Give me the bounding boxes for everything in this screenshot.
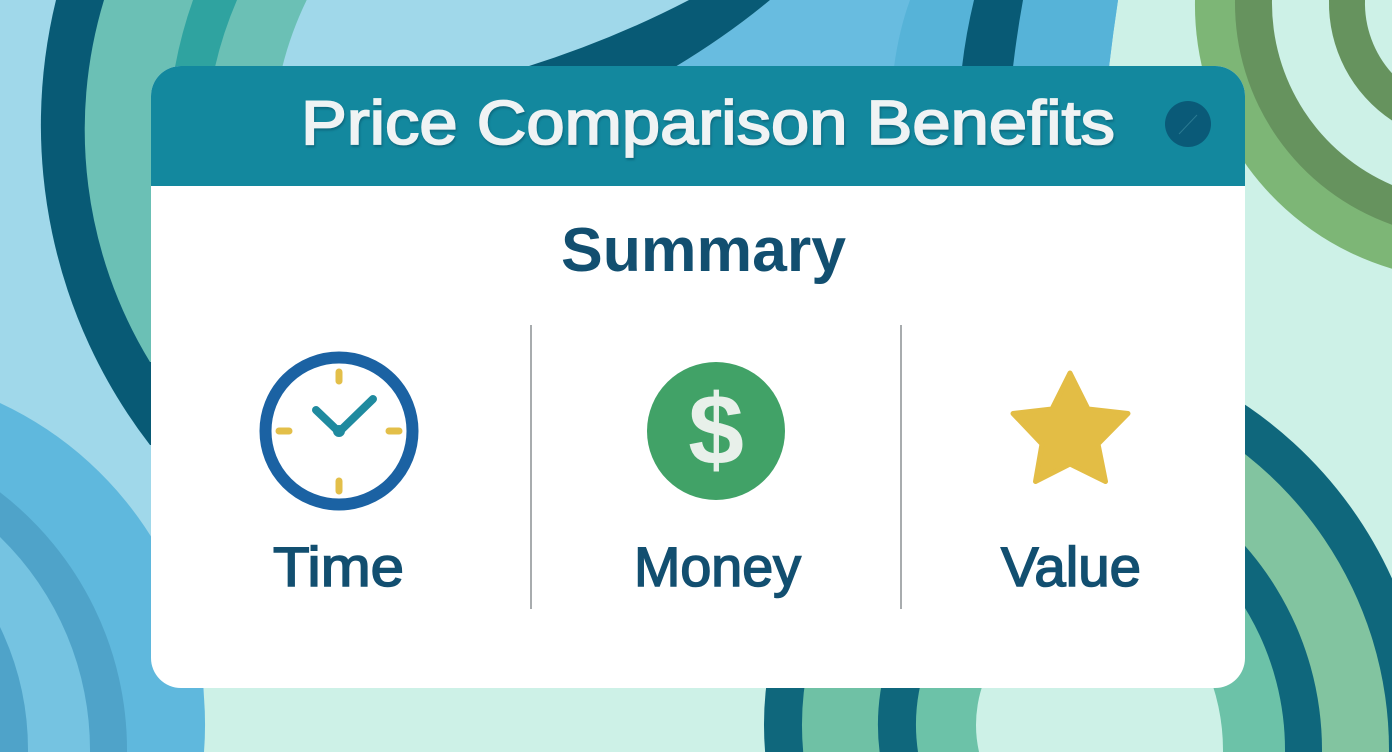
icon: dollar coin: $ — [688, 374, 744, 486]
arcs: top centre blue bands — [526, 0, 1118, 67]
icon: star — [1013, 373, 1128, 482]
label: value: Value — [1001, 535, 1141, 598]
panel: summary card — [151, 66, 1245, 688]
panel header band — [151, 66, 1245, 186]
column: money — [634, 362, 801, 598]
arcs: bottom centre rings — [764, 660, 1160, 752]
arcs: lower right rings — [1150, 357, 1392, 752]
heading: summary: Summary — [561, 216, 847, 285]
arcs: upper left dark and teal rings — [41, 0, 340, 445]
column: value — [1001, 373, 1141, 598]
icon: clock — [266, 358, 412, 504]
arcs: top right green rings — [1195, 0, 1392, 269]
arcs: lower left blue rings — [0, 403, 205, 752]
label: time: Time — [273, 535, 404, 598]
icon: dollar coin — [647, 362, 785, 500]
header button — [1165, 101, 1211, 147]
column: time — [266, 358, 412, 598]
label: money: Money — [634, 535, 801, 598]
title: Price Comparison Benefits — [301, 89, 1115, 158]
